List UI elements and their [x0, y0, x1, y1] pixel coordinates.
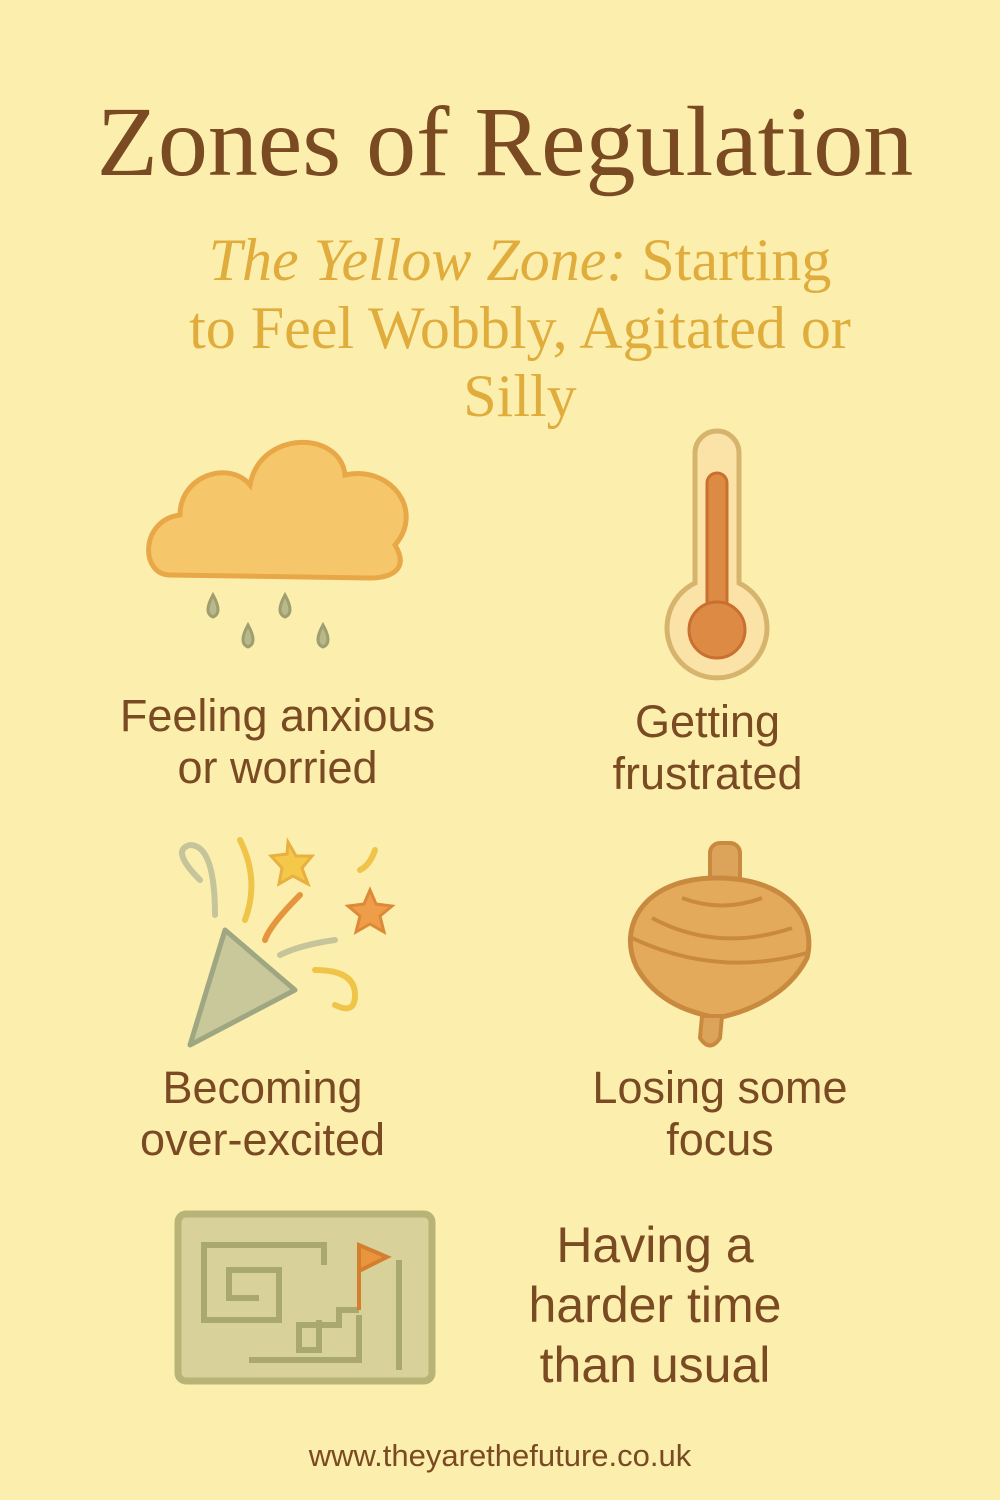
label: focus: focus [666, 1114, 774, 1165]
label: harder time: than usual [540, 1337, 770, 1393]
label: anxious [120, 690, 435, 793]
subtitle [189, 227, 851, 429]
label: over-excited: over-excited [140, 1114, 385, 1165]
label: over-excited [140, 1062, 385, 1165]
title: Zones of Regulation [97, 86, 913, 197]
icon: rain cloud [146, 440, 409, 648]
label: harder time: Having a [556, 1217, 754, 1273]
label: anxious: Feeling anxious [120, 690, 435, 741]
label: harder time: harder time [529, 1277, 781, 1333]
icon: spinning top [628, 841, 812, 1048]
icon: maze [174, 1210, 436, 1384]
label: frustrated: Getting [635, 696, 780, 747]
subtitle: The Yellow Zone: Starting [209, 227, 831, 293]
icon: party popper [179, 837, 396, 1048]
label: anxious: or worried [177, 742, 378, 793]
label: frustrated [612, 696, 803, 799]
icon: thermometer [664, 428, 770, 680]
label: frustrated: frustrated [612, 748, 803, 799]
subtitle: to Feel Wobbly, Agitated or [189, 295, 851, 361]
subtitle: Silly [463, 363, 577, 429]
label: over-excited: Becoming [162, 1062, 363, 1113]
label: focus: Losing some [592, 1062, 848, 1113]
label: harder time [529, 1217, 781, 1393]
footer url: www.theyarethefuture.co.uk [309, 1438, 691, 1473]
label: focus [592, 1062, 848, 1165]
